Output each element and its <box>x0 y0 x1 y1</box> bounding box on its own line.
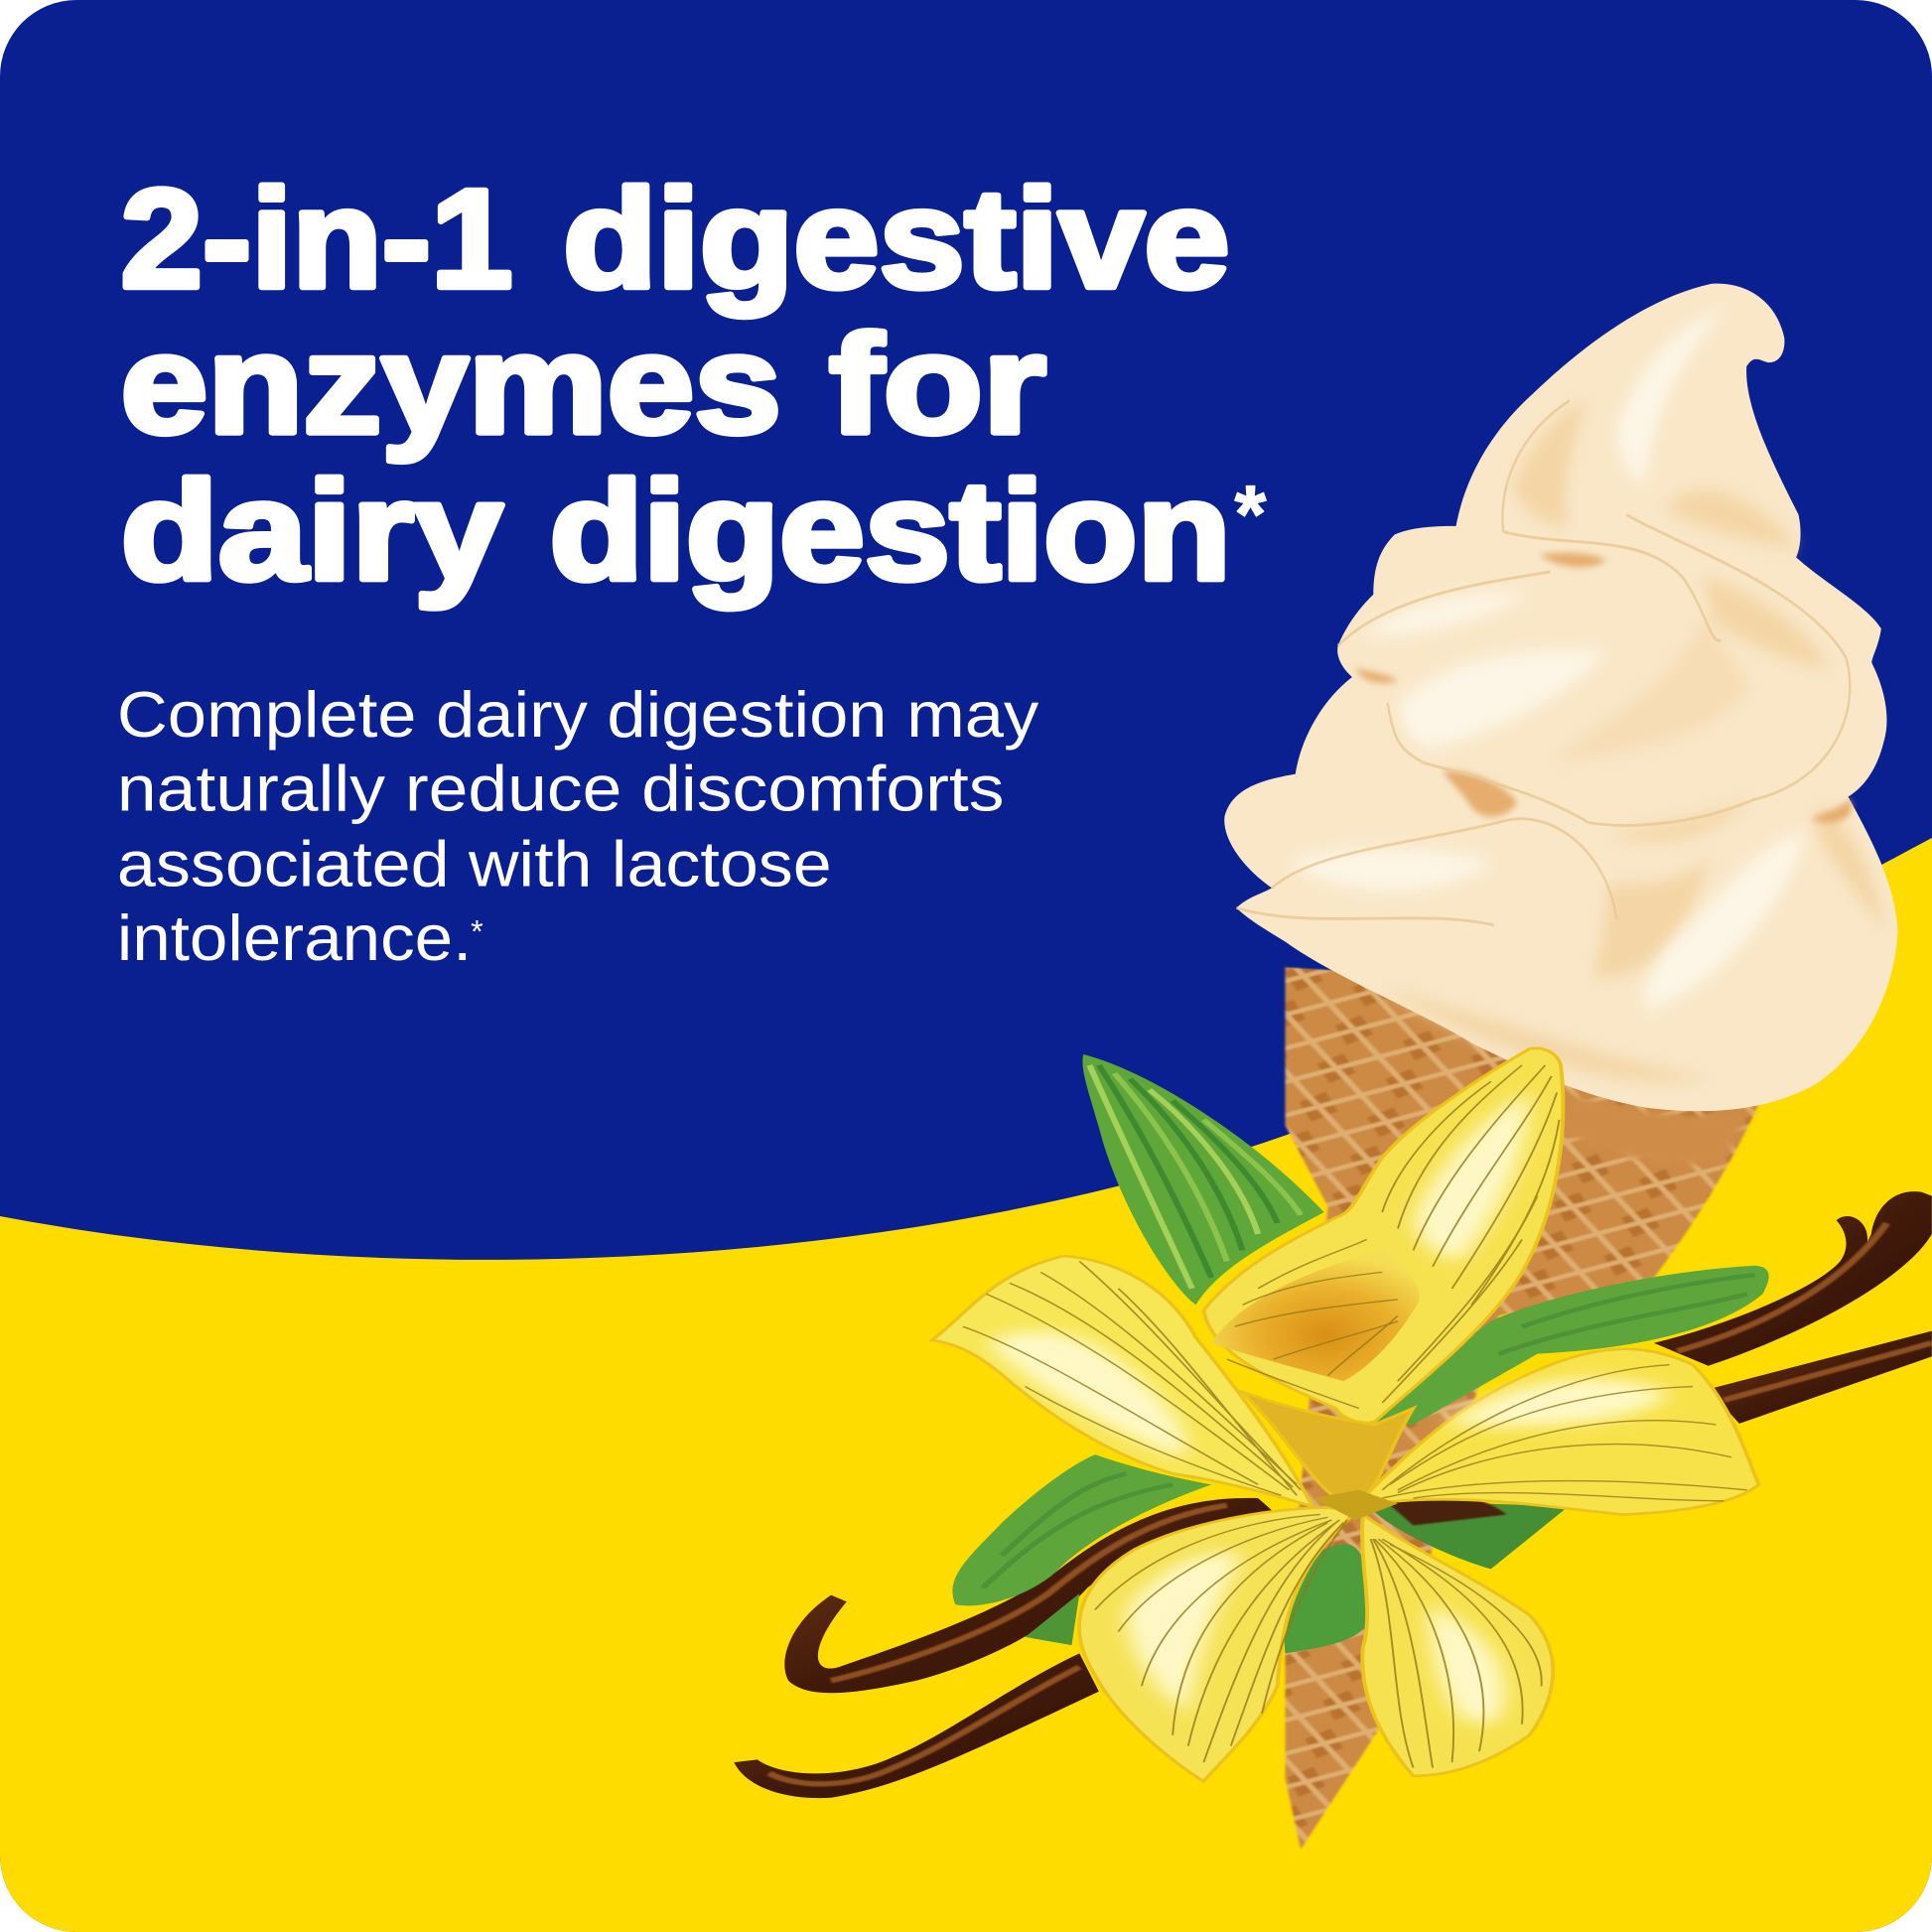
petal: bottom right <box>1362 1514 1553 1776</box>
ice cream swirl lines <box>1236 401 1850 925</box>
petal: bottom left <box>1079 1508 1359 1781</box>
waffle cone <box>1285 967 1801 1850</box>
petal highlights <box>986 1092 1670 1724</box>
heading: enzymes <box>121 306 781 463</box>
petal: top <box>1203 1048 1563 1423</box>
heading: digestion <box>550 452 1231 609</box>
petal: left <box>932 1256 1312 1506</box>
petal veins <box>963 1065 1747 1768</box>
yellow curved background <box>0 838 1932 1932</box>
heading <box>121 160 1267 609</box>
petal: right <box>1355 1349 1758 1514</box>
body text <box>117 679 1039 974</box>
heading: 2-in-1 <box>121 160 512 317</box>
dark pod shadow at flower centre <box>1390 1501 1507 1527</box>
green leaves <box>952 1054 1769 1653</box>
heading: dairy <box>121 452 502 609</box>
ice cream soft shading <box>1380 401 1886 1082</box>
heading: * <box>1235 470 1267 560</box>
body text: * <box>471 913 483 949</box>
body text: intolerance. <box>117 902 472 974</box>
heading: digestive <box>563 160 1230 317</box>
vanilla flower with pods and leaves <box>734 1048 1932 1798</box>
soft serve ice cream <box>1224 284 1897 1111</box>
vanilla flower petals <box>932 1048 1758 1781</box>
pod highlights <box>769 1223 1932 1784</box>
ice cream base shape <box>1224 284 1897 1111</box>
vanilla pods <box>734 1191 1932 1798</box>
body text: naturally reduce discomforts <box>117 754 1004 825</box>
flower orange centre <box>1211 1250 1420 1381</box>
body text: Complete dairy digestion may <box>117 679 1039 751</box>
petal: centre column <box>1242 1392 1414 1509</box>
ice cream tan creases <box>1354 553 1852 823</box>
flower centre knot <box>1312 1490 1398 1520</box>
ice cream highlights <box>1286 310 1806 1011</box>
body text: associated with lactose <box>117 828 832 899</box>
heading: for <box>829 306 1046 463</box>
